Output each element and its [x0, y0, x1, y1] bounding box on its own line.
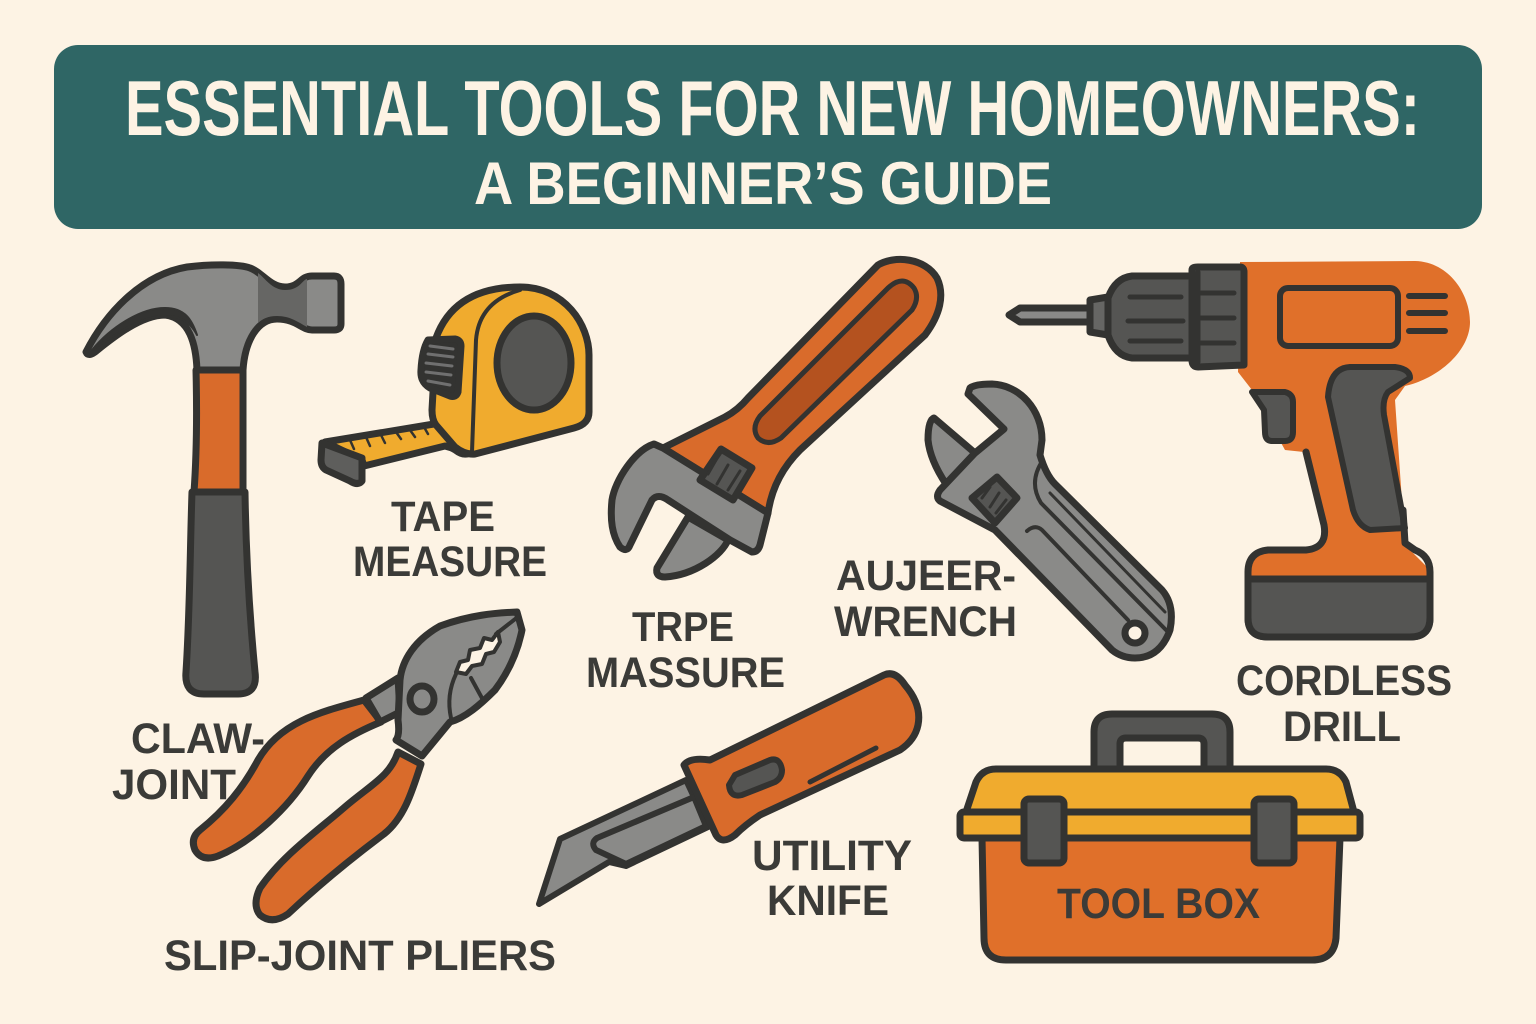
label: tool box: TOOL BOX: [1057, 880, 1260, 928]
label: adjuster wrench: WRENCH: [834, 598, 1017, 646]
icon: claw hammer: [86, 265, 341, 694]
icon: slip-joint pliers: [193, 612, 522, 920]
label: utility knife: [752, 832, 912, 925]
label: adjuster wrench: [834, 552, 1017, 646]
label: claw hammer: JOINT: [112, 761, 236, 809]
label: adjuster wrench: AUJEER-: [836, 552, 1016, 600]
label: tape measure: [353, 493, 547, 586]
icon: small adjustable wrench: [928, 384, 1171, 658]
icon: tool box: [960, 714, 1360, 960]
label: tape measure duplicate: MASSURE: [586, 649, 785, 697]
subtitle: A BEGINNER’S GUIDE: [474, 150, 1052, 217]
label: tape measure duplicate: [586, 603, 785, 697]
icon: utility knife: [539, 674, 919, 904]
label: utility knife: KNIFE: [767, 877, 889, 925]
icon: cordless drill: [1009, 261, 1470, 637]
icon: large adjustable wrench: [611, 259, 941, 577]
label: cordless drill: DRILL: [1283, 703, 1401, 751]
label: tape measure duplicate: TRPE: [632, 603, 734, 650]
label: tape measure: TAPE: [391, 493, 495, 541]
title banner: [54, 45, 1482, 229]
label: claw hammer: CLAW-: [131, 715, 265, 763]
label: cordless drill: [1236, 657, 1452, 751]
label: claw hammer: [112, 715, 265, 809]
label: cordless drill: CORDLESS: [1236, 657, 1452, 705]
label: tape measure: MEASURE: [353, 538, 547, 586]
icon: tape measure: [321, 287, 589, 484]
label: utility knife: UTILITY: [752, 832, 912, 880]
label: slip-joint pliers: SLIP-JOINT PLIERS: [164, 932, 556, 980]
